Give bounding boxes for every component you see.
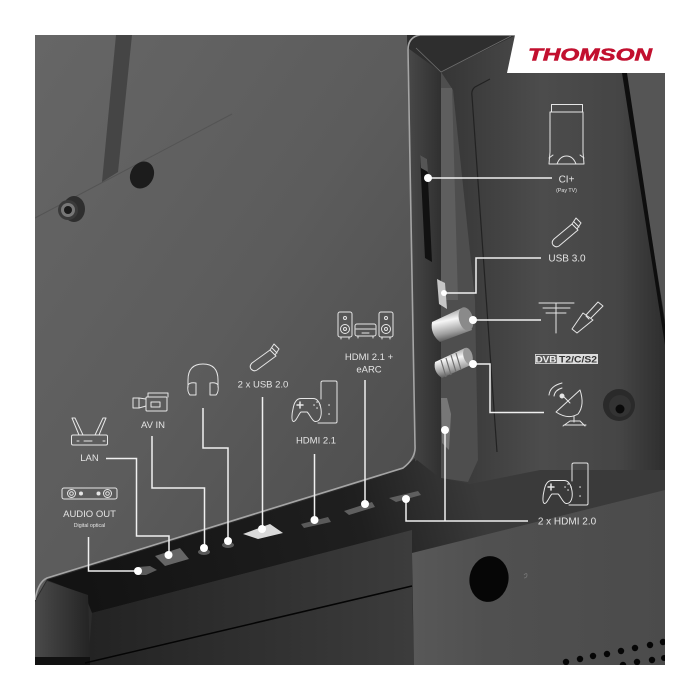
label: CI+ — [559, 174, 575, 186]
port: headphones — [222, 542, 234, 548]
icon: satellite dish — [549, 383, 586, 426]
card slot — [420, 155, 432, 262]
connector line — [262, 397, 264, 529]
satellite connector — [435, 347, 475, 378]
icon: CI card — [549, 104, 584, 164]
port: av in — [198, 549, 210, 555]
label: 2 x HDMI 2.0 — [538, 516, 597, 528]
callout: 2 x USB 2.0 — [238, 344, 288, 533]
screw hole on back cover — [130, 162, 154, 188]
antenna connector — [432, 306, 476, 342]
usb slot — [437, 279, 447, 309]
dot — [224, 537, 232, 545]
icon: console and gamepad — [543, 463, 588, 505]
dot — [402, 495, 410, 503]
bezel highlight edge — [35, 35, 516, 600]
base layer — [35, 35, 465, 664]
label: USB 3.0 — [548, 254, 586, 264]
vertical rail on back cover — [102, 35, 132, 182]
icon: usb stick — [552, 218, 581, 247]
callout: audio out — [62, 488, 142, 575]
label: AUDIO OUT — [63, 509, 116, 520]
connector line — [88, 537, 138, 571]
panel: lower stand cover — [412, 490, 665, 665]
connector line — [444, 258, 541, 293]
icon: coax cable — [572, 302, 603, 333]
dot — [258, 525, 266, 533]
label: HDMI 2.1 — [296, 436, 336, 446]
connector line — [473, 364, 544, 412]
port: usb 2.0 — [243, 524, 283, 539]
badge: DVB: DVB — [536, 354, 557, 364]
callout: HDMI 2.1 — [292, 381, 337, 524]
callout: AV IN — [133, 393, 208, 552]
port: hdmi earc — [344, 502, 375, 515]
icon: router — [72, 418, 108, 445]
dot — [469, 316, 477, 324]
callout: headphones — [188, 364, 232, 545]
icon: antenna — [539, 303, 574, 333]
dot — [424, 174, 432, 182]
dot — [200, 544, 208, 552]
callout: USB 3.0 — [441, 218, 586, 296]
callout: LAN — [72, 418, 172, 559]
callout: satellite — [469, 360, 586, 426]
port: lan — [155, 548, 189, 566]
panel: side connector strip — [408, 35, 516, 482]
icon: hi-fi speakers — [338, 312, 393, 339]
icon: console and gamepad — [292, 381, 337, 423]
connector line — [152, 436, 204, 548]
connector line — [364, 380, 366, 504]
dot — [134, 567, 142, 575]
label: HDMI 2.1 + — [345, 352, 394, 363]
hdmi side slot — [441, 398, 451, 450]
sub-label: (Pay TV) — [556, 188, 577, 194]
icon: usb stick — [250, 344, 279, 371]
panel: bottom connector ledge — [35, 460, 665, 665]
icon: headphones — [188, 364, 218, 395]
wall mount socket right — [603, 389, 635, 421]
callout: 2 x HDMI 2.0 — [402, 426, 597, 528]
panel: main back cover — [35, 35, 415, 600]
port: hdmi 2.0 — [389, 491, 421, 502]
wall mount knob — [58, 196, 85, 222]
connector line — [406, 430, 528, 521]
dot — [441, 290, 447, 296]
label: LAN — [80, 453, 99, 464]
connector line — [428, 177, 552, 179]
dot — [164, 551, 172, 559]
dot — [361, 500, 369, 508]
dot — [469, 360, 477, 368]
label: AV IN — [141, 420, 165, 431]
icon: camcorder — [133, 393, 168, 411]
connector line — [473, 319, 541, 321]
panel: right side housing — [442, 36, 665, 484]
badge: DVB — [535, 354, 598, 364]
dot — [310, 516, 318, 524]
sub-label: Digital optical — [74, 523, 105, 529]
label: 2 x USB 2.0 — [238, 380, 288, 390]
port: hdmi 2.1 — [301, 517, 331, 528]
callout: HDMI 2.1 + eARC — [338, 312, 394, 508]
dot — [441, 426, 449, 434]
connector line — [314, 454, 316, 520]
stand cover mark — [524, 574, 527, 578]
stand cover hole — [469, 556, 509, 602]
callout: CI+ — [424, 104, 584, 194]
logo plate — [507, 35, 665, 73]
logo: Thomson: THOMSON — [528, 44, 652, 64]
label second line: eARC — [356, 364, 382, 376]
port: audio optical — [138, 566, 157, 575]
connector line — [203, 408, 228, 541]
callout: antenna — [469, 302, 603, 333]
speaker grille — [562, 638, 665, 665]
icon: soundbar — [62, 488, 117, 499]
badge: DVB: T2/C/S2 — [559, 354, 597, 364]
connector line — [106, 458, 169, 555]
